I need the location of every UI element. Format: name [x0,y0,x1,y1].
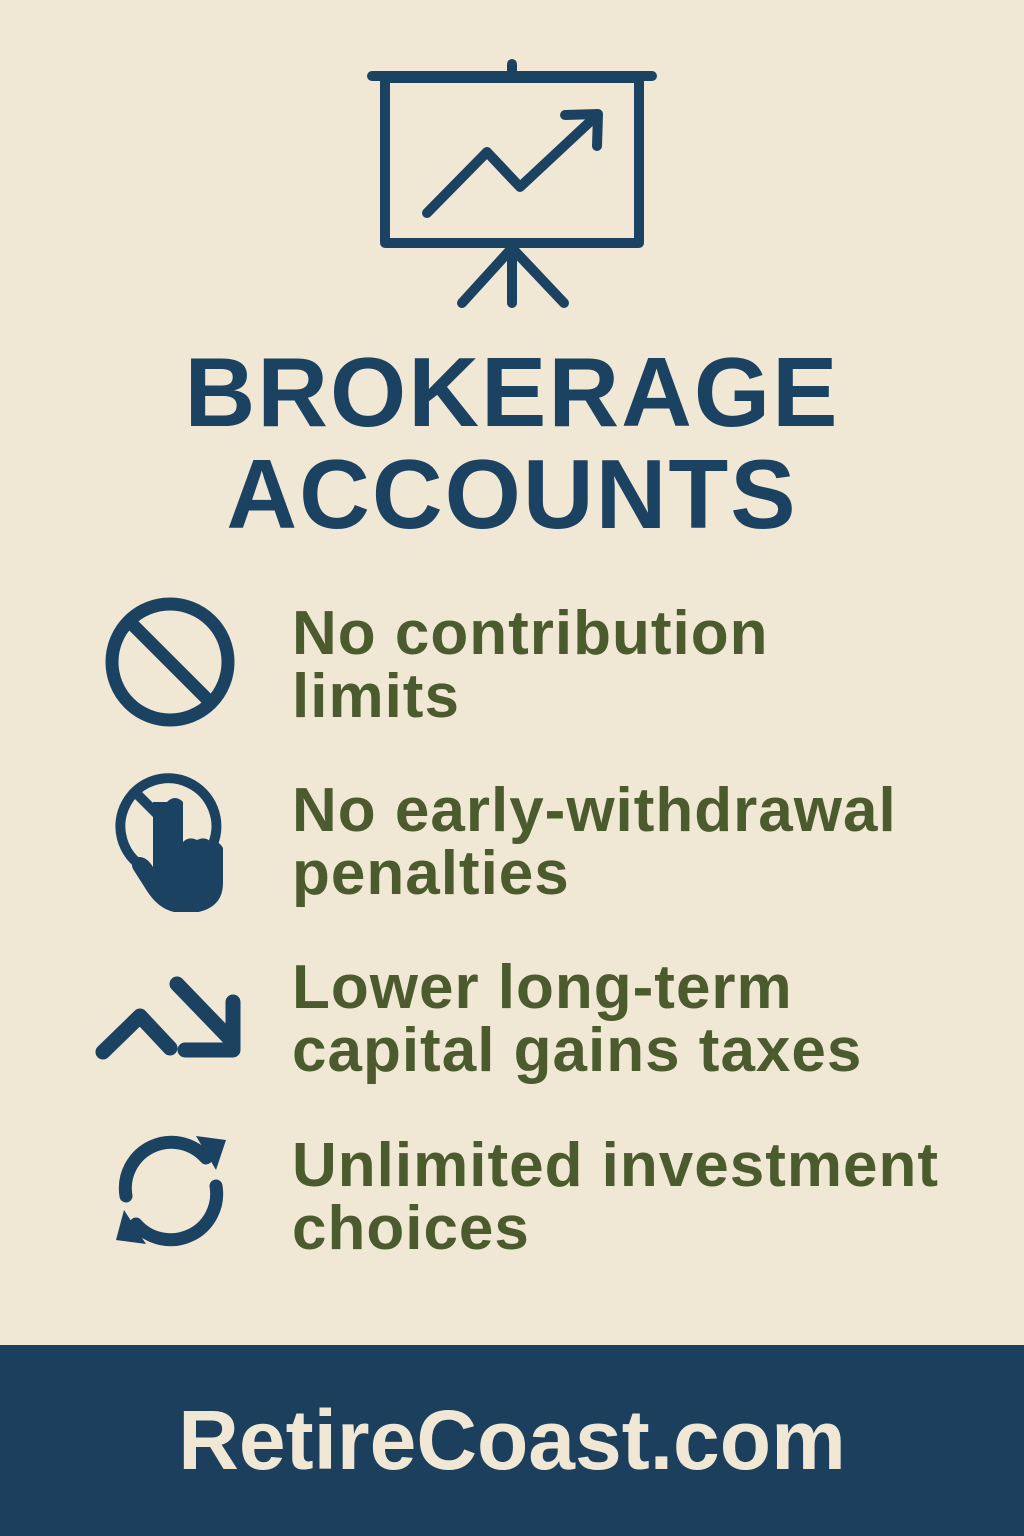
item 3 [292,953,862,1085]
item 4: Unlimited investment [292,1131,939,1200]
item 1: No contribution [292,599,768,668]
title: BROKERAGE [184,337,840,447]
item 2 [292,776,897,908]
item 2: No early-withdrawal [292,776,897,845]
footer [0,1345,1024,1536]
title: ACCOUNTS [226,439,798,549]
icon: prohibited [106,598,234,726]
icon: down arrow [96,976,240,1060]
icon: presentation board [367,59,657,308]
title [184,337,840,549]
item 3: capital gains taxes [292,1016,862,1085]
item 4 [292,1131,939,1263]
icon: refresh [116,1136,226,1246]
item 3: Lower long-term [292,953,793,1022]
item 4: choices [292,1194,530,1263]
item 1 [292,599,768,731]
item 2: penalties [292,839,570,908]
icon: hand [115,773,223,912]
footer: RetireCoast.com [178,1393,846,1487]
item 1: limits [292,662,460,731]
